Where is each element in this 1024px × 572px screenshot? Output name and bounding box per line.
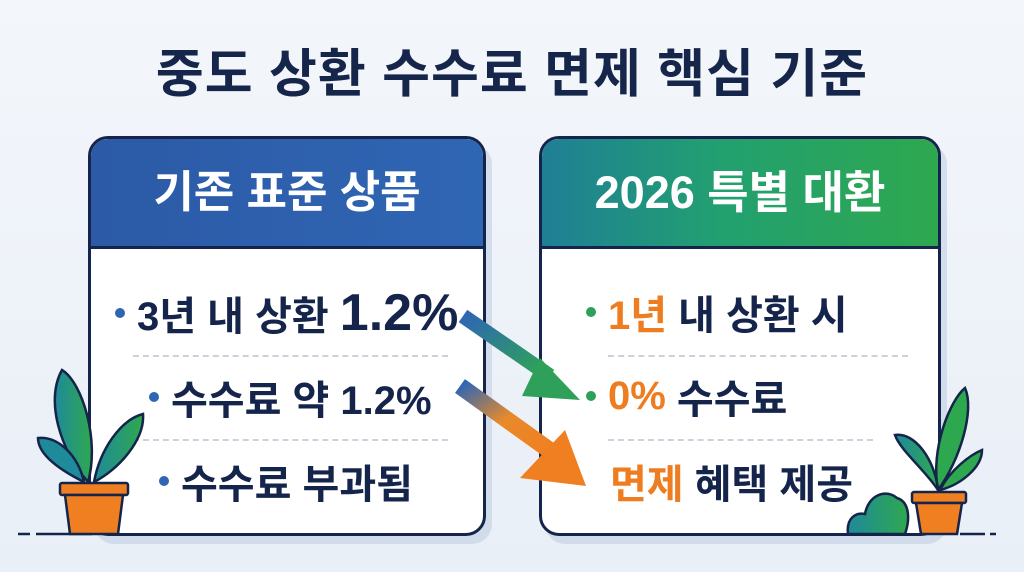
- row 1: [586, 294, 848, 338]
- title: 중도 상환 수수료 면제 핵심 기준: [156, 46, 868, 104]
- row 3: 혜택 제공: [695, 463, 853, 507]
- row 2: [586, 374, 787, 422]
- row 2: 수수료 약 1.2%: [171, 379, 432, 423]
- header: standard: [91, 139, 483, 249]
- row 1: 내 상환 시: [678, 294, 848, 338]
- row 1: [115, 284, 458, 342]
- header: 2026: [542, 139, 938, 249]
- arrow: blue to orange: [460, 386, 586, 486]
- row 1: 1.2%: [340, 284, 458, 342]
- row 3: 수수료 부과됨: [181, 463, 413, 507]
- row 1: 3년 내 상환: [137, 295, 329, 339]
- row 1: 1년: [608, 294, 667, 338]
- row 2: 0%: [608, 374, 666, 418]
- row 2: 수수료: [677, 378, 787, 422]
- header: 2026: 2026 특별 대환: [595, 167, 885, 218]
- plant left: [18, 370, 143, 534]
- header: standard: 기존 표준 상품: [153, 168, 421, 217]
- row 3: [610, 463, 853, 507]
- row 3: 면제: [610, 463, 684, 507]
- panel: 2026 special: [539, 136, 941, 536]
- arrow: blue to green: [463, 316, 580, 400]
- plant right and bush: [848, 388, 996, 534]
- panel: standard product: [88, 136, 486, 536]
